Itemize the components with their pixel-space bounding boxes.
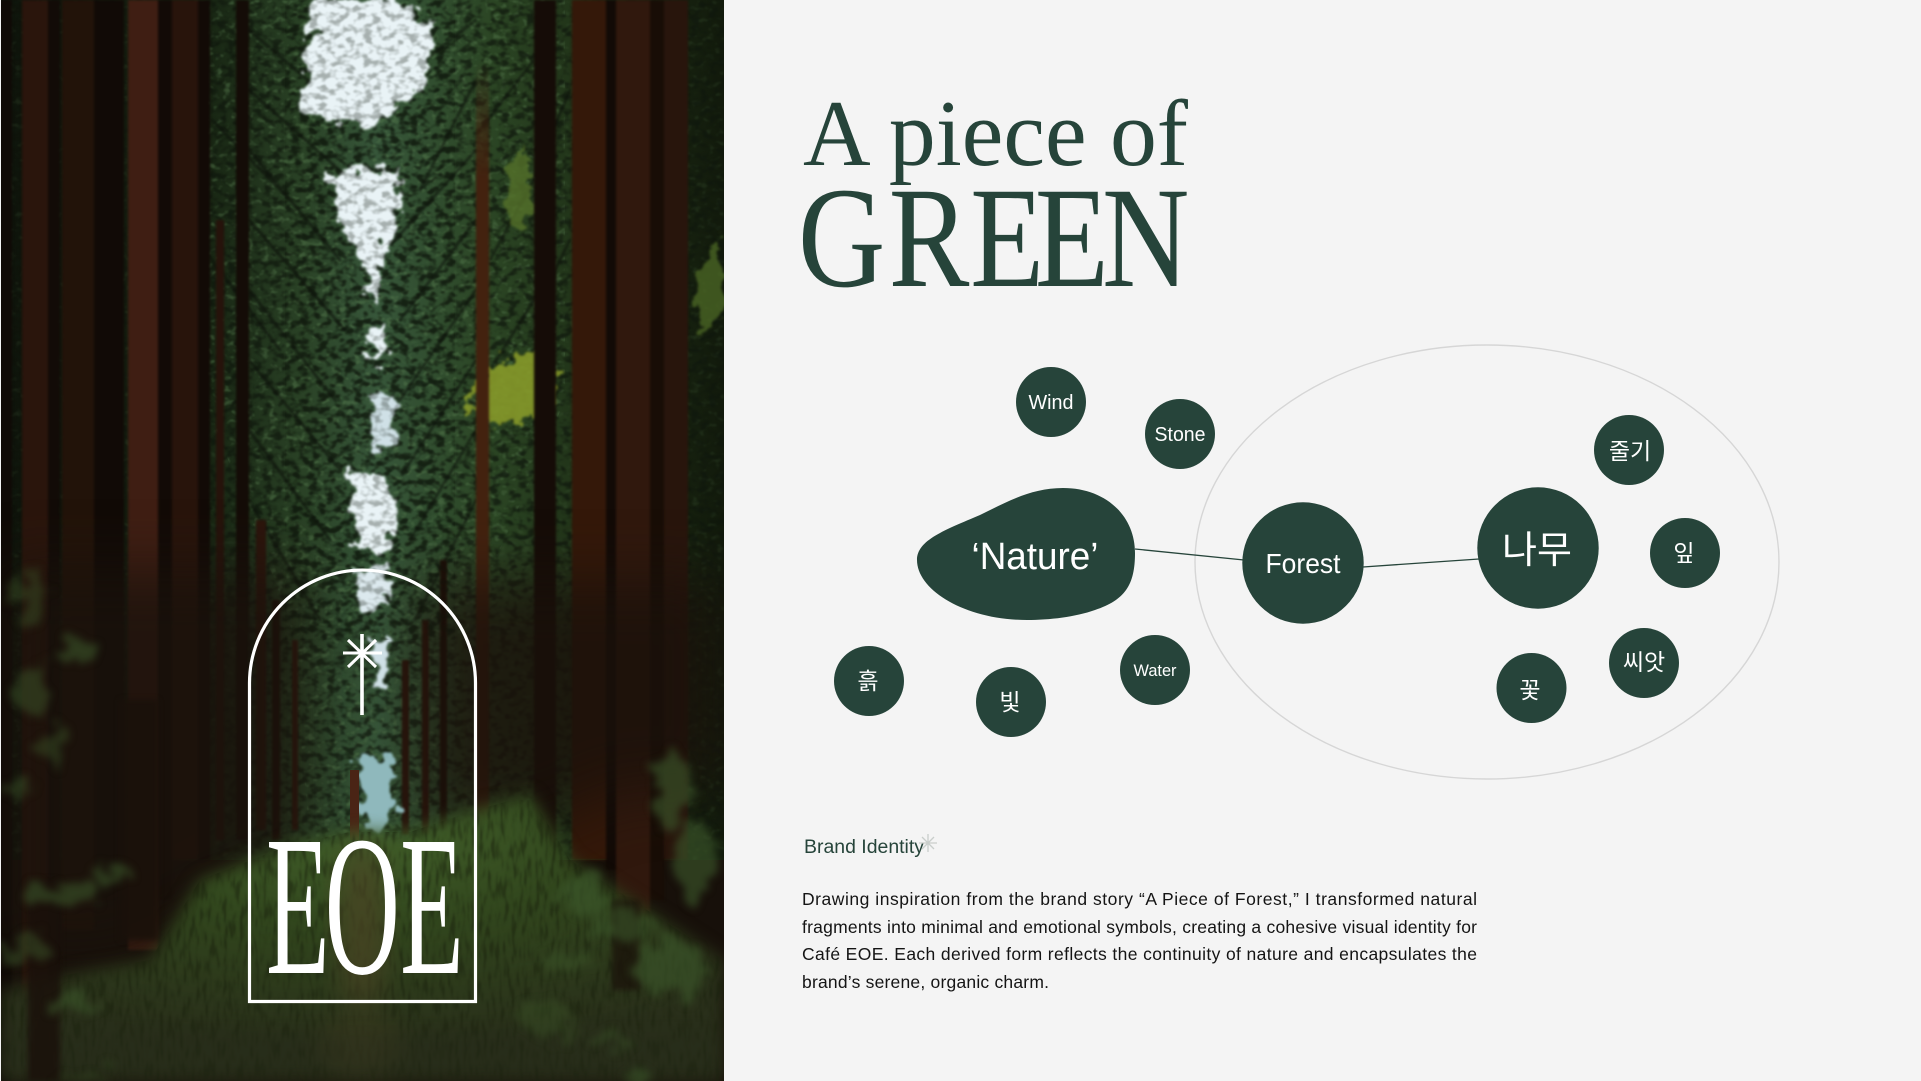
node: leaf <box>1650 518 1720 588</box>
logo wordmark: EOE <box>266 796 464 1017</box>
body text: Café EOE. Each derived form reflects the continuity of nature and encapsulates the <box>802 944 1477 964</box>
node: Nature blob <box>917 488 1135 620</box>
node: tree: 나무 <box>1502 530 1572 572</box>
node: leaf: 잎 <box>1673 540 1695 566</box>
icon: star with stem <box>343 634 382 715</box>
body text: Drawing inspiration from the brand story “A Piece of Forest,” I transformed natural <box>802 889 1477 909</box>
node: Stone: Stone <box>1154 424 1206 446</box>
node: light: 빛 <box>999 689 1021 715</box>
sky through the canopy <box>300 0 434 830</box>
dark foreground trunks <box>26 874 642 1080</box>
lower forest shadows <box>0 570 724 960</box>
node: light <box>976 667 1046 737</box>
body text: brand’s serene, organic charm. <box>802 972 1049 992</box>
node: Forest: Forest <box>1266 548 1341 579</box>
grass slope <box>0 795 724 1081</box>
forest boundary ellipse <box>1195 345 1779 779</box>
node: seed <box>1609 628 1679 698</box>
node: stem: 줄기 <box>1609 438 1651 464</box>
node: soil: 흙 <box>857 668 879 694</box>
photo: forest path with pine trees <box>0 0 724 1081</box>
pine branches <box>212 20 570 620</box>
connector: forest to tree <box>1363 559 1479 567</box>
node: Water <box>1120 635 1190 705</box>
node: seed: 씨앗 <box>1623 649 1665 675</box>
sunlit lime leaves <box>470 146 724 428</box>
node: tree <box>1477 487 1599 609</box>
pine foliage canopy <box>0 0 724 860</box>
arch outline <box>250 570 476 1002</box>
node: Stone <box>1145 399 1215 469</box>
node: flower: 꽃 <box>1519 677 1541 703</box>
icon: faint star <box>919 834 937 852</box>
tree trunks <box>0 0 688 1081</box>
node: flower <box>1496 653 1566 723</box>
node: stem <box>1594 415 1664 485</box>
connector: nature to forest <box>1135 549 1244 560</box>
section heading: Brand Identity: Brand Identity <box>804 837 924 858</box>
node: Wind <box>1016 367 1086 437</box>
title line two: GREEN <box>798 158 1189 317</box>
node: Water: Water <box>1134 662 1177 680</box>
node: soil <box>834 646 904 716</box>
blurred foreground bushes <box>0 566 717 1081</box>
leaf mottling over the sky <box>297 0 450 640</box>
logo: EOE arch mark <box>250 570 476 1017</box>
title <box>798 82 1189 317</box>
diagram: nature to forest to tree mind map <box>834 345 1779 779</box>
distant trunk at the path end <box>350 770 359 840</box>
node: Forest <box>1242 502 1364 624</box>
node: Wind: Wind <box>1028 392 1074 414</box>
title line one: A piece of <box>803 82 1189 186</box>
node: Nature blob: ‘Nature’ <box>972 536 1098 578</box>
body text <box>802 889 1477 992</box>
body text: fragments into minimal and emotional symbols, creating a cohesive visual identity for <box>802 917 1477 937</box>
